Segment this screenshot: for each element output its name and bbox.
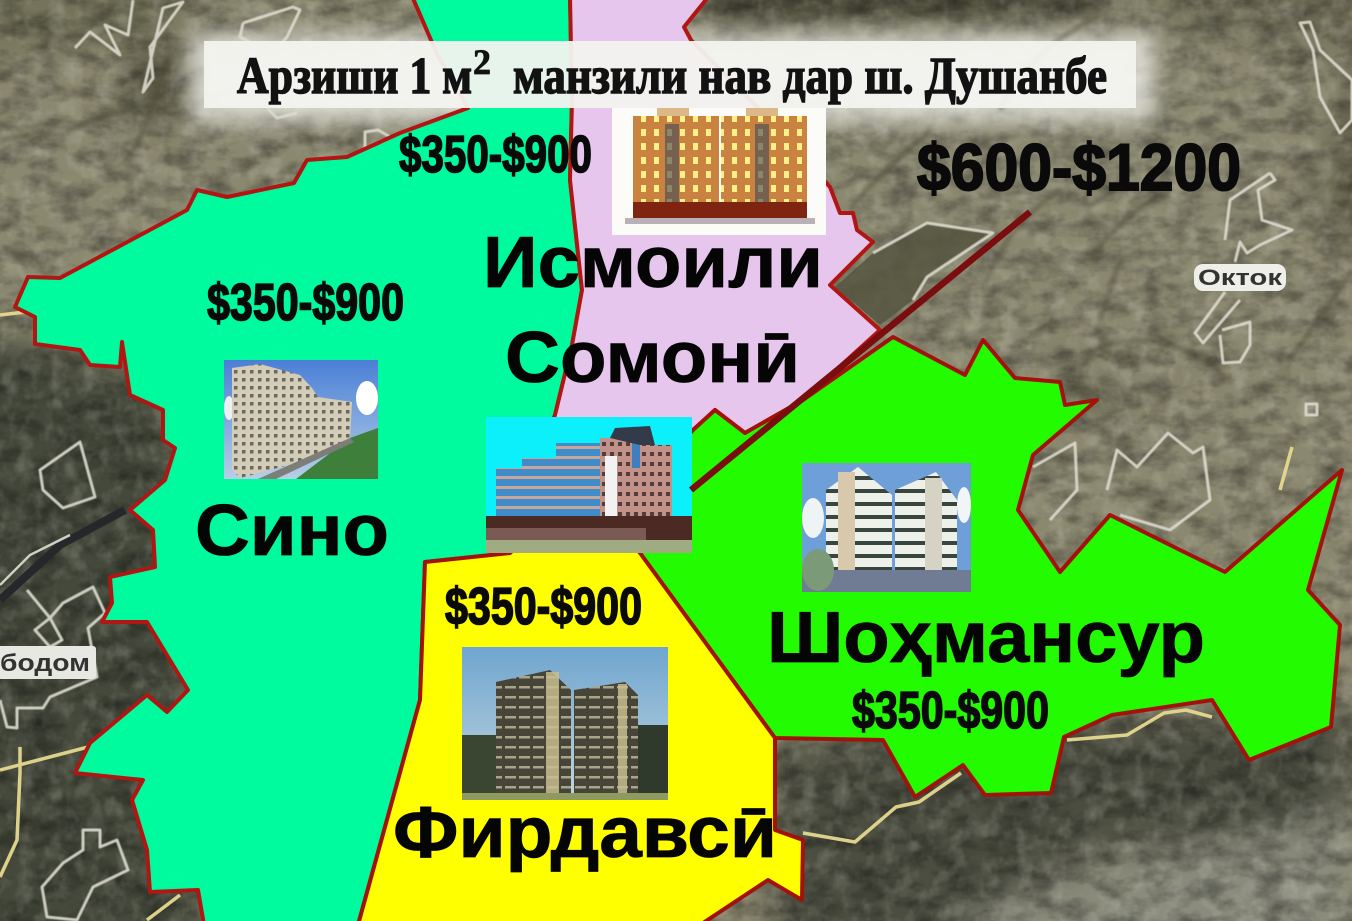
title text: Арзиши 1 м [237, 48, 472, 105]
dark hill parcel [835, 223, 993, 325]
title text: 2 [473, 42, 491, 82]
photo: central blue and pink tower [486, 417, 692, 553]
map label: Окток: Окток [1198, 265, 1283, 290]
district: Шоҳмансур (green) [640, 337, 1342, 797]
title text: манзили нав дар ш. Душанбе [513, 48, 1107, 105]
title text [237, 42, 1107, 105]
label: Шоҳмансур: Шоҳмансур [767, 598, 1205, 678]
roads [0, 312, 1292, 920]
photo: orange apartment facade [612, 108, 826, 235]
district: Фирдавсӣ (yellow) [358, 540, 803, 921]
district: Сино (cyan-green) [15, 0, 582, 921]
district: Исмоили Сомонӣ (pink) [545, 0, 880, 445]
label: Исмоили: Исмоили [483, 223, 823, 303]
price: $600-$1200: $600-$1200 [917, 130, 1241, 204]
price: $350-$900 Сино north: $350-$900 [399, 126, 592, 184]
photo: Фирдавсӣ twin towers [462, 647, 668, 800]
label: Сино: Сино [195, 491, 389, 571]
price: $350-$900 Шоҳмансур: $350-$900 [852, 682, 1049, 740]
label: Сомонӣ: Сомонӣ [505, 318, 800, 398]
title banner [204, 41, 1136, 108]
map label: бодом [0, 646, 96, 679]
price: $350-$900 Сино: $350-$900 [207, 274, 404, 332]
photo: Шоҳмансур twin buildings [802, 463, 971, 592]
white glow behind banner [190, 34, 1155, 122]
label: Фирдавсӣ: Фирдавсӣ [393, 793, 777, 873]
photo: Сино high-rise [224, 360, 378, 479]
map label: Окток [1194, 264, 1286, 291]
map label: бодом: бодом [0, 650, 90, 677]
price: $350-$900 Фирдавсӣ: $350-$900 [445, 578, 642, 636]
leader line for Шоҳмансур price [691, 212, 1030, 490]
